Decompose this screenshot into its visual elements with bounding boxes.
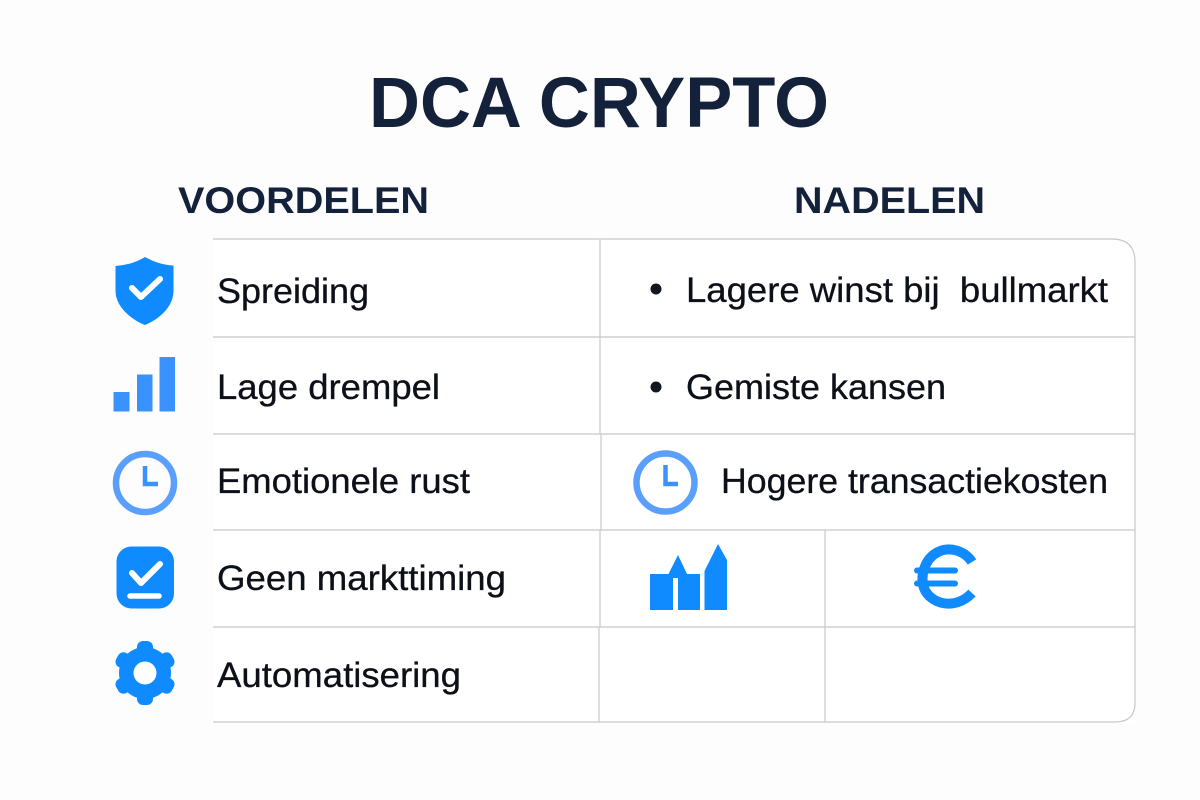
row: emotionele rust <box>116 454 470 512</box>
text: Emotionele rust <box>217 462 470 501</box>
row: spreiding <box>116 257 369 325</box>
text: Spreiding <box>217 272 369 311</box>
icon: bar chart <box>114 357 175 412</box>
row: lage drempel <box>114 357 440 412</box>
row: hogere transactiekosten <box>636 454 1108 512</box>
text: Hogere transactiekosten <box>721 462 1108 501</box>
icon: euro <box>917 549 972 604</box>
icon: checkbox <box>116 546 174 608</box>
icon: gear <box>113 641 177 705</box>
text: Lage drempel <box>217 368 440 407</box>
text: Automatisering <box>217 656 461 695</box>
heading: voordelen: VOORDELEN <box>178 180 429 221</box>
panel: voordelen <box>113 257 506 705</box>
icon: clock <box>116 454 174 512</box>
table grid <box>213 239 1135 723</box>
row: automatisering <box>113 641 461 705</box>
text: Geen markttiming <box>217 559 506 598</box>
text: Lagere winst bij bullmarkt <box>686 271 1108 310</box>
row: lagere winst bij bullmarkt <box>650 271 1108 310</box>
text: Gemiste kansen <box>686 368 946 407</box>
row: gemiste kansen <box>650 368 946 407</box>
title: DCA CRYPTO <box>369 64 829 143</box>
panel: nadelen <box>636 271 1108 610</box>
icon: clock <box>636 454 694 512</box>
row: geen markttiming <box>116 546 506 608</box>
icon: shield with check <box>116 257 174 325</box>
bullet <box>650 382 662 392</box>
icon: buildings <box>650 544 727 610</box>
bullet <box>650 284 662 294</box>
heading: nadelen: NADELEN <box>794 180 985 221</box>
